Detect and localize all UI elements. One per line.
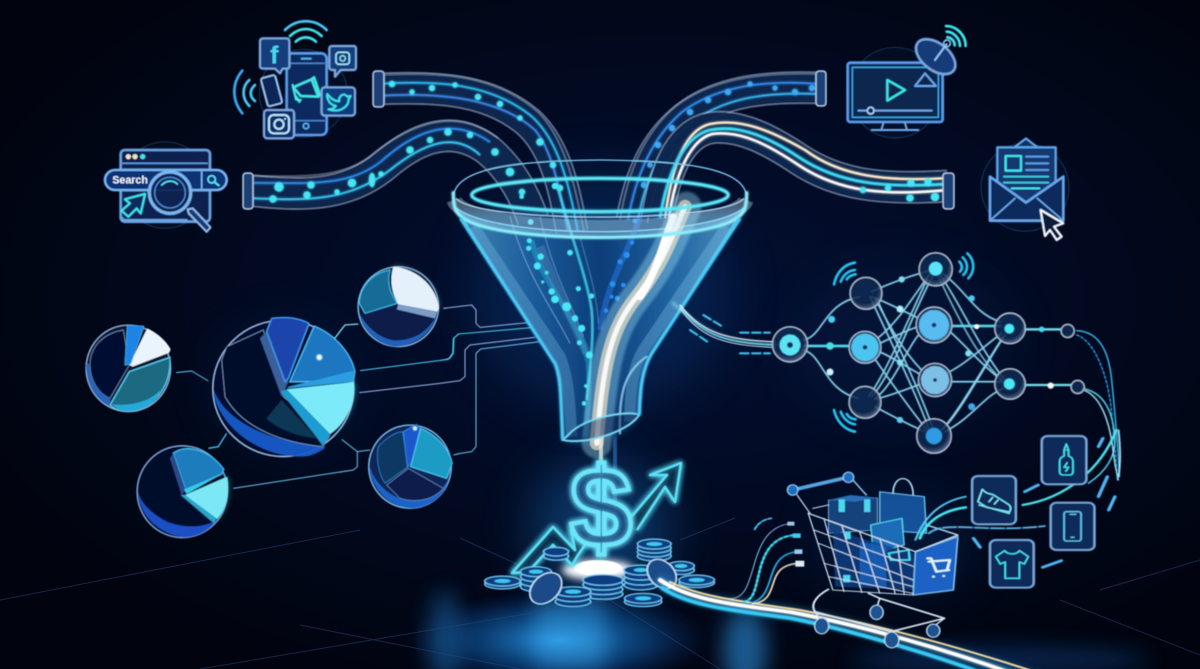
dollar sign: $ (570, 445, 632, 570)
funnel bottom opening (563, 413, 639, 441)
rising arrow (512, 527, 595, 573)
tile: bottle (1042, 436, 1086, 484)
signal arcs (834, 253, 973, 432)
shopping cart (787, 430, 1120, 648)
funnel edge glow (461, 218, 563, 440)
icon: dollar and arrows (512, 445, 681, 580)
pipe: upper left (373, 71, 584, 232)
tile: phone (1051, 503, 1094, 550)
output streams (1077, 331, 1119, 483)
coin top emblems (494, 542, 705, 600)
inner strands (510, 183, 640, 437)
pie node dot (317, 355, 322, 360)
soft glows behind elements (215, 170, 1015, 600)
small phone (260, 75, 283, 107)
connections (803, 271, 1072, 432)
megaphone (293, 77, 320, 102)
blue particles (604, 218, 637, 313)
pie: bottom right (369, 424, 452, 508)
icon: video monitor and satellite (848, 26, 966, 138)
tile: shoe (972, 476, 1016, 524)
pipe: lower left (243, 121, 533, 220)
feed cables into cart (730, 518, 804, 604)
funnel outer glow (457, 210, 747, 444)
coin stacks (485, 539, 715, 608)
light column below funnel (600, 430, 616, 570)
connector lines to funnel (440, 305, 540, 454)
facebook bubble (260, 38, 289, 73)
standing coins (523, 569, 568, 608)
instagram tile (264, 110, 294, 138)
funnel rim (453, 160, 747, 237)
glass side bands (473, 227, 727, 437)
cart handle (793, 477, 851, 490)
bright streak (597, 207, 687, 443)
pipe: lower right (657, 122, 954, 218)
growth arrow (627, 463, 681, 530)
icon: social media phone: f (270, 41, 279, 69)
search label: Search (112, 175, 148, 187)
pie: left (86, 325, 171, 412)
input stream (673, 303, 777, 353)
pie: bottom left (137, 446, 228, 538)
neural network (673, 253, 1119, 483)
cart basket wires (797, 495, 958, 595)
pipe: upper right (620, 71, 826, 220)
cyan particles (520, 183, 594, 405)
cart front panel (913, 537, 958, 595)
pie connector lines (176, 308, 458, 488)
pie: large centre (213, 317, 355, 457)
cart goods (828, 479, 927, 590)
icon: email envelope (981, 138, 1069, 240)
node highlights (783, 262, 1054, 444)
light trail (660, 580, 1060, 669)
floor (0, 518, 1200, 669)
icon: search browser (105, 142, 227, 232)
back coins (544, 539, 715, 590)
tile: shirt (990, 540, 1034, 588)
pie charts (86, 267, 452, 538)
cart frame (813, 589, 944, 632)
front coins (485, 567, 662, 607)
instagram bubble (329, 46, 356, 77)
funnel glass body (455, 207, 745, 441)
funnel (453, 160, 747, 444)
pie: top right (358, 267, 439, 347)
product tiles (972, 436, 1094, 588)
twitter tile (322, 87, 355, 116)
nodes (772, 253, 1084, 453)
streams to product tiles (915, 430, 1120, 567)
icon: social media phone (234, 21, 356, 138)
